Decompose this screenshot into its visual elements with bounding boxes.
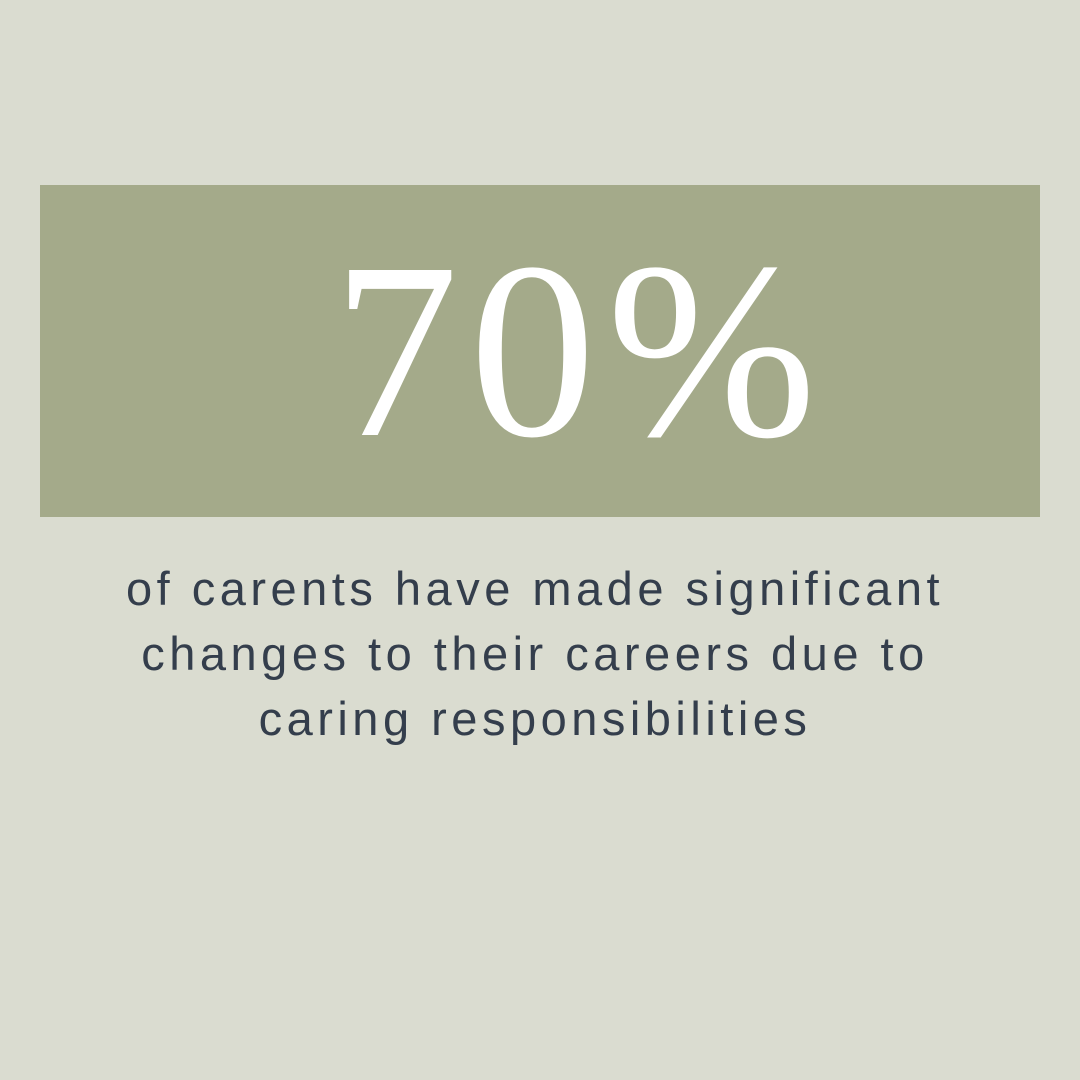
text block: description: changes to their careers due to: [141, 627, 929, 680]
text block: description: [126, 562, 944, 745]
panel: stat box: [40, 185, 1040, 517]
text block: description: of carents have made significant: [126, 562, 944, 615]
text block: description: caring responsibilities: [259, 692, 811, 745]
headline number: 70%: [333, 210, 827, 490]
